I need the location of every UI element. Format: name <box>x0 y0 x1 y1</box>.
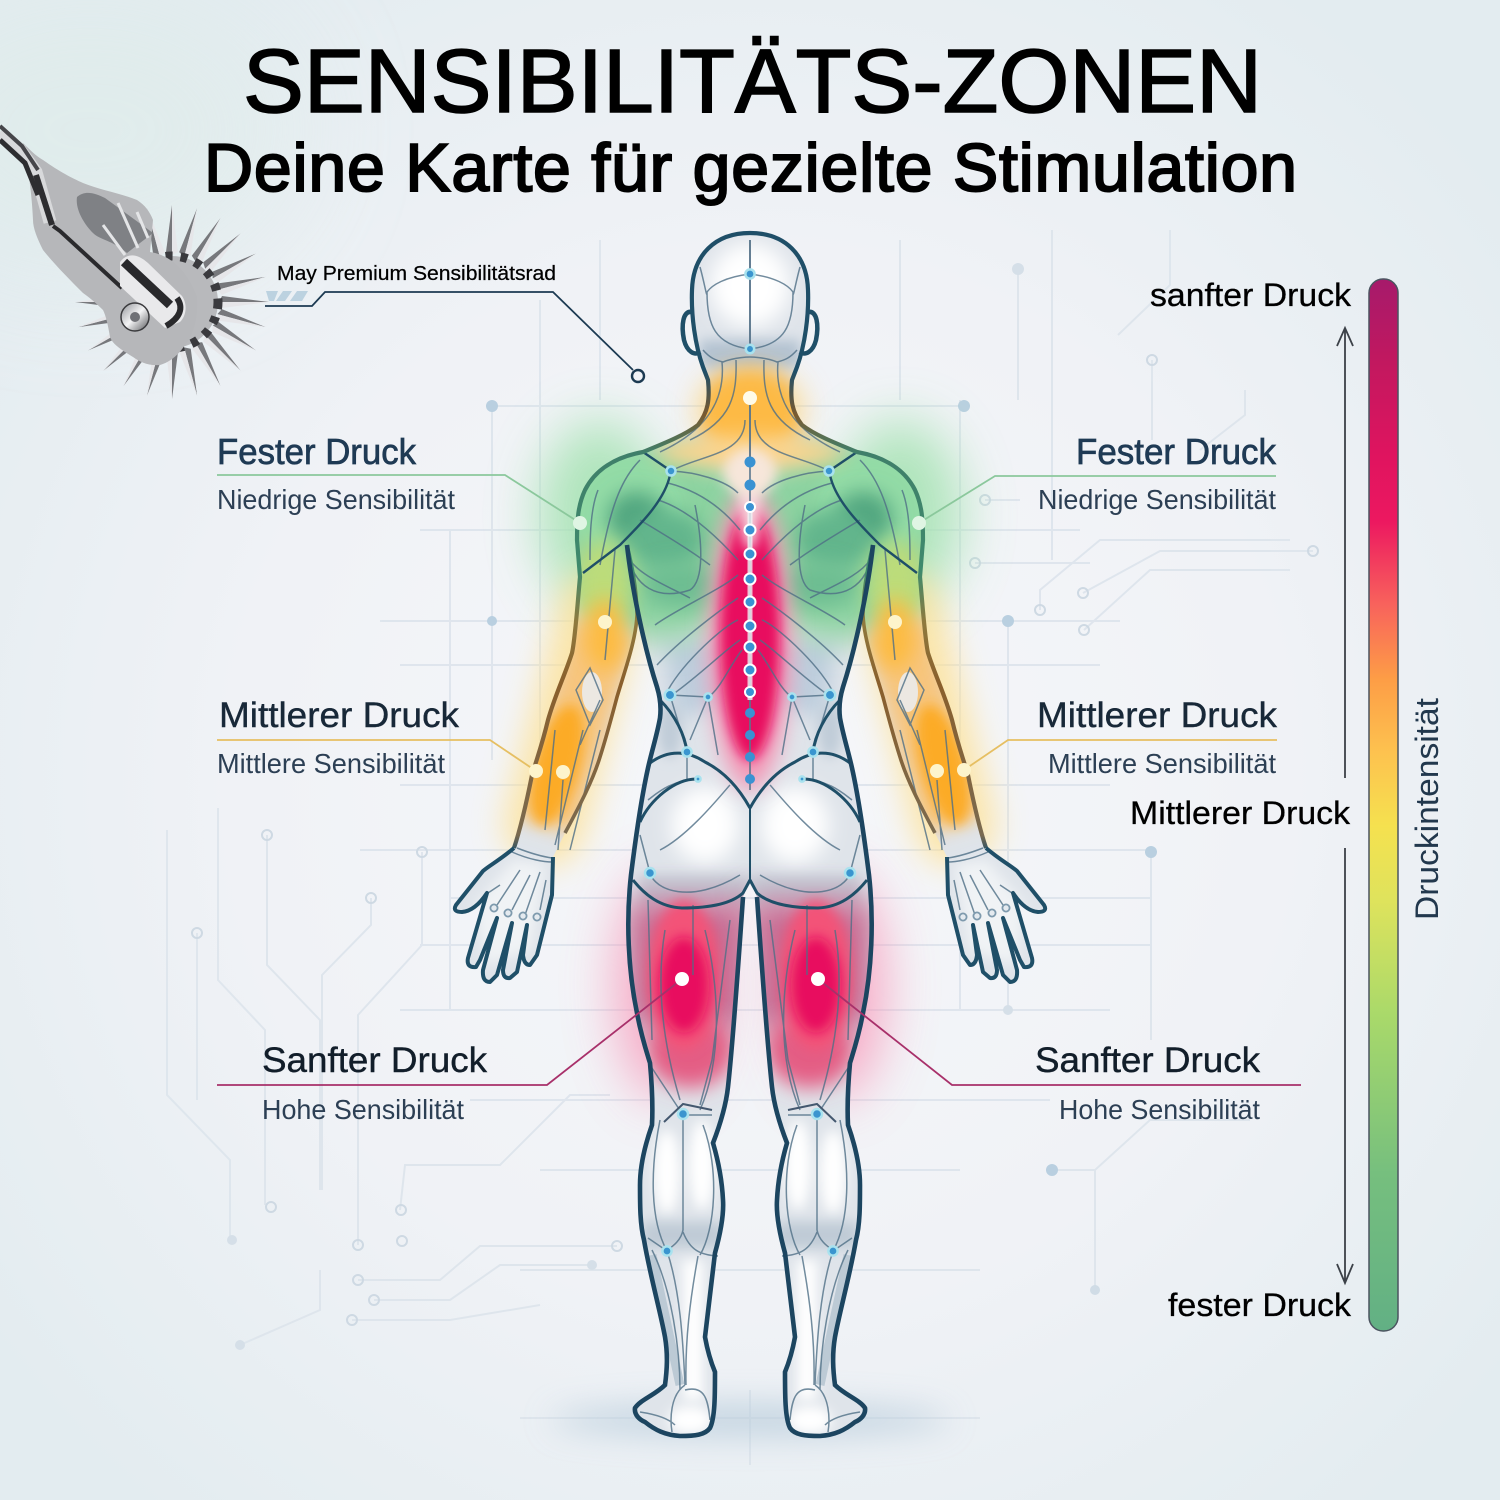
silhouette fill <box>440 220 1060 1450</box>
tool callout: May Premium Sensibilitätsrad <box>277 263 556 285</box>
labels: left: Hohe Sensibilität <box>262 1094 464 1125</box>
labels: left: Mittlere Sensibilität <box>217 748 445 779</box>
arm colours <box>573 540 633 630</box>
labels: right: Niedrige Sensibilität <box>1038 484 1276 515</box>
neck heat <box>694 366 806 458</box>
labels: left: Niedrige Sensibilität <box>217 484 455 515</box>
scale labels: sanfter Druck <box>1150 277 1352 313</box>
pressure scale <box>1130 277 1445 1331</box>
labels: right: Mittlere Sensibilität <box>1048 748 1276 779</box>
green zone <box>555 440 765 640</box>
body nodes <box>645 466 712 1256</box>
outer glows <box>538 374 793 1100</box>
labels: left: Mittlerer Druck <box>219 696 460 735</box>
scale title: Druckintensität <box>1409 698 1445 920</box>
labels: left: Sanfter Druck <box>262 1041 488 1080</box>
outline <box>514 233 750 848</box>
labels: right: Hohe Sensibilität <box>1059 1094 1260 1125</box>
spine nodes <box>743 240 757 790</box>
title: SENSIBILITÄTS-ZONEN <box>243 32 1262 132</box>
gradient bar <box>1369 279 1398 1331</box>
labels: right: Mittlerer Druck <box>1037 696 1278 735</box>
spine heat <box>708 490 792 790</box>
tool callout <box>265 263 644 382</box>
arrow down <box>1337 848 1353 1283</box>
zone points <box>529 516 971 986</box>
labels: left <box>217 431 488 1125</box>
knuckles <box>490 904 541 921</box>
hand tone <box>475 860 545 965</box>
ground shadow <box>550 1404 950 1436</box>
ear <box>683 312 700 354</box>
leader lines <box>217 475 1301 1085</box>
labels: right: Fester Druck <box>1076 431 1277 472</box>
labels: left: Fester Druck <box>217 431 417 472</box>
half body lines <box>455 233 750 1436</box>
body figure <box>440 220 1060 1450</box>
muscle lines <box>485 240 750 1432</box>
labels: right <box>1035 431 1278 1125</box>
arrow up <box>1337 328 1353 778</box>
pressure scale: fester Druck <box>1168 1287 1352 1323</box>
glute and hip lines <box>583 452 750 908</box>
pressure scale: Mittlerer Druck <box>1130 795 1351 831</box>
thigh colours <box>625 900 750 1030</box>
subtitle: Deine Karte für gezielte Stimulation <box>204 130 1297 206</box>
icon: pinwheel tool <box>0 126 269 399</box>
labels: right: Sanfter Druck <box>1035 1041 1261 1080</box>
